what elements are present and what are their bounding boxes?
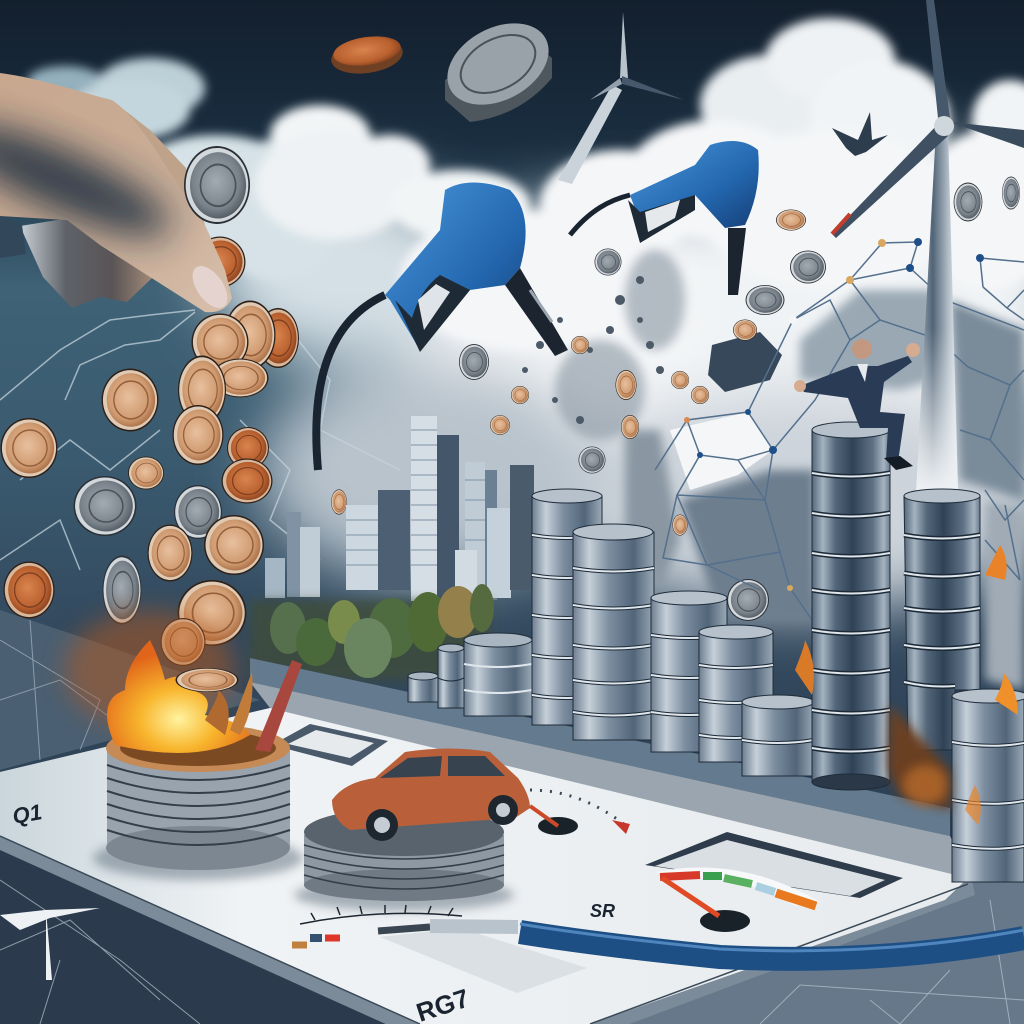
barrel stack 4 [532, 489, 602, 725]
small turbine icon bottom left [0, 908, 100, 980]
dashboard panel [0, 708, 975, 1024]
dashboard label center: SR [590, 901, 615, 921]
rear finger [118, 105, 205, 245]
silver coin [177, 137, 257, 233]
dashboard label left: Q1 [11, 799, 44, 829]
barrel stack 8 [742, 695, 814, 776]
small aircraft [832, 112, 888, 156]
barrel stack 7 [699, 625, 773, 762]
ledge under barrels [250, 658, 950, 836]
barrel stack 3 [464, 633, 532, 716]
coin stack under car [294, 808, 514, 911]
hand holding coin [0, 73, 257, 314]
hand shadow [0, 104, 182, 256]
cuff shadow [0, 215, 26, 258]
index finger and palm [0, 73, 232, 312]
map ground bottom [0, 830, 1024, 1024]
map ground left [0, 610, 260, 770]
small gauge top [272, 724, 388, 766]
fuel hose [378, 924, 1024, 959]
center dial gauge [530, 790, 630, 835]
businessman on barrels [794, 339, 920, 470]
lower finger [20, 218, 152, 308]
network mesh [655, 238, 1024, 620]
large fuel gauge [645, 832, 903, 932]
gray strip behind panel [250, 682, 972, 880]
debris and scattered coins [331, 176, 1020, 621]
falling coins [0, 300, 299, 666]
lightning lines [0, 310, 400, 570]
barrel stack 5 [573, 524, 654, 740]
clouds [27, 18, 1024, 610]
held copper coin [194, 236, 246, 288]
barrel stack 1 [408, 672, 438, 702]
blue fuel nozzle left [316, 182, 568, 470]
network dome fill [625, 290, 1024, 690]
fingernail [186, 260, 234, 314]
flame [107, 640, 250, 753]
barrel stack 10 [904, 489, 980, 750]
burning coin stack [65, 610, 303, 880]
city skyline [265, 416, 534, 601]
sparks glow [65, 610, 235, 730]
barrel stack 6 [651, 591, 727, 752]
coin above flame [176, 668, 238, 692]
barrel stacks [408, 422, 1024, 882]
large wind turbine [832, 0, 1024, 490]
barrel stack 11 [952, 689, 1024, 882]
barrel stack 2 [438, 644, 464, 708]
flying coins at top [329, 7, 563, 122]
fires by barrels [795, 545, 1018, 825]
small gauge bottom [292, 905, 587, 993]
far wind turbine [558, 12, 684, 184]
trees [250, 584, 494, 680]
barrel stack 9 [812, 422, 890, 790]
blue fuel nozzle right [570, 141, 759, 295]
car [332, 748, 530, 841]
